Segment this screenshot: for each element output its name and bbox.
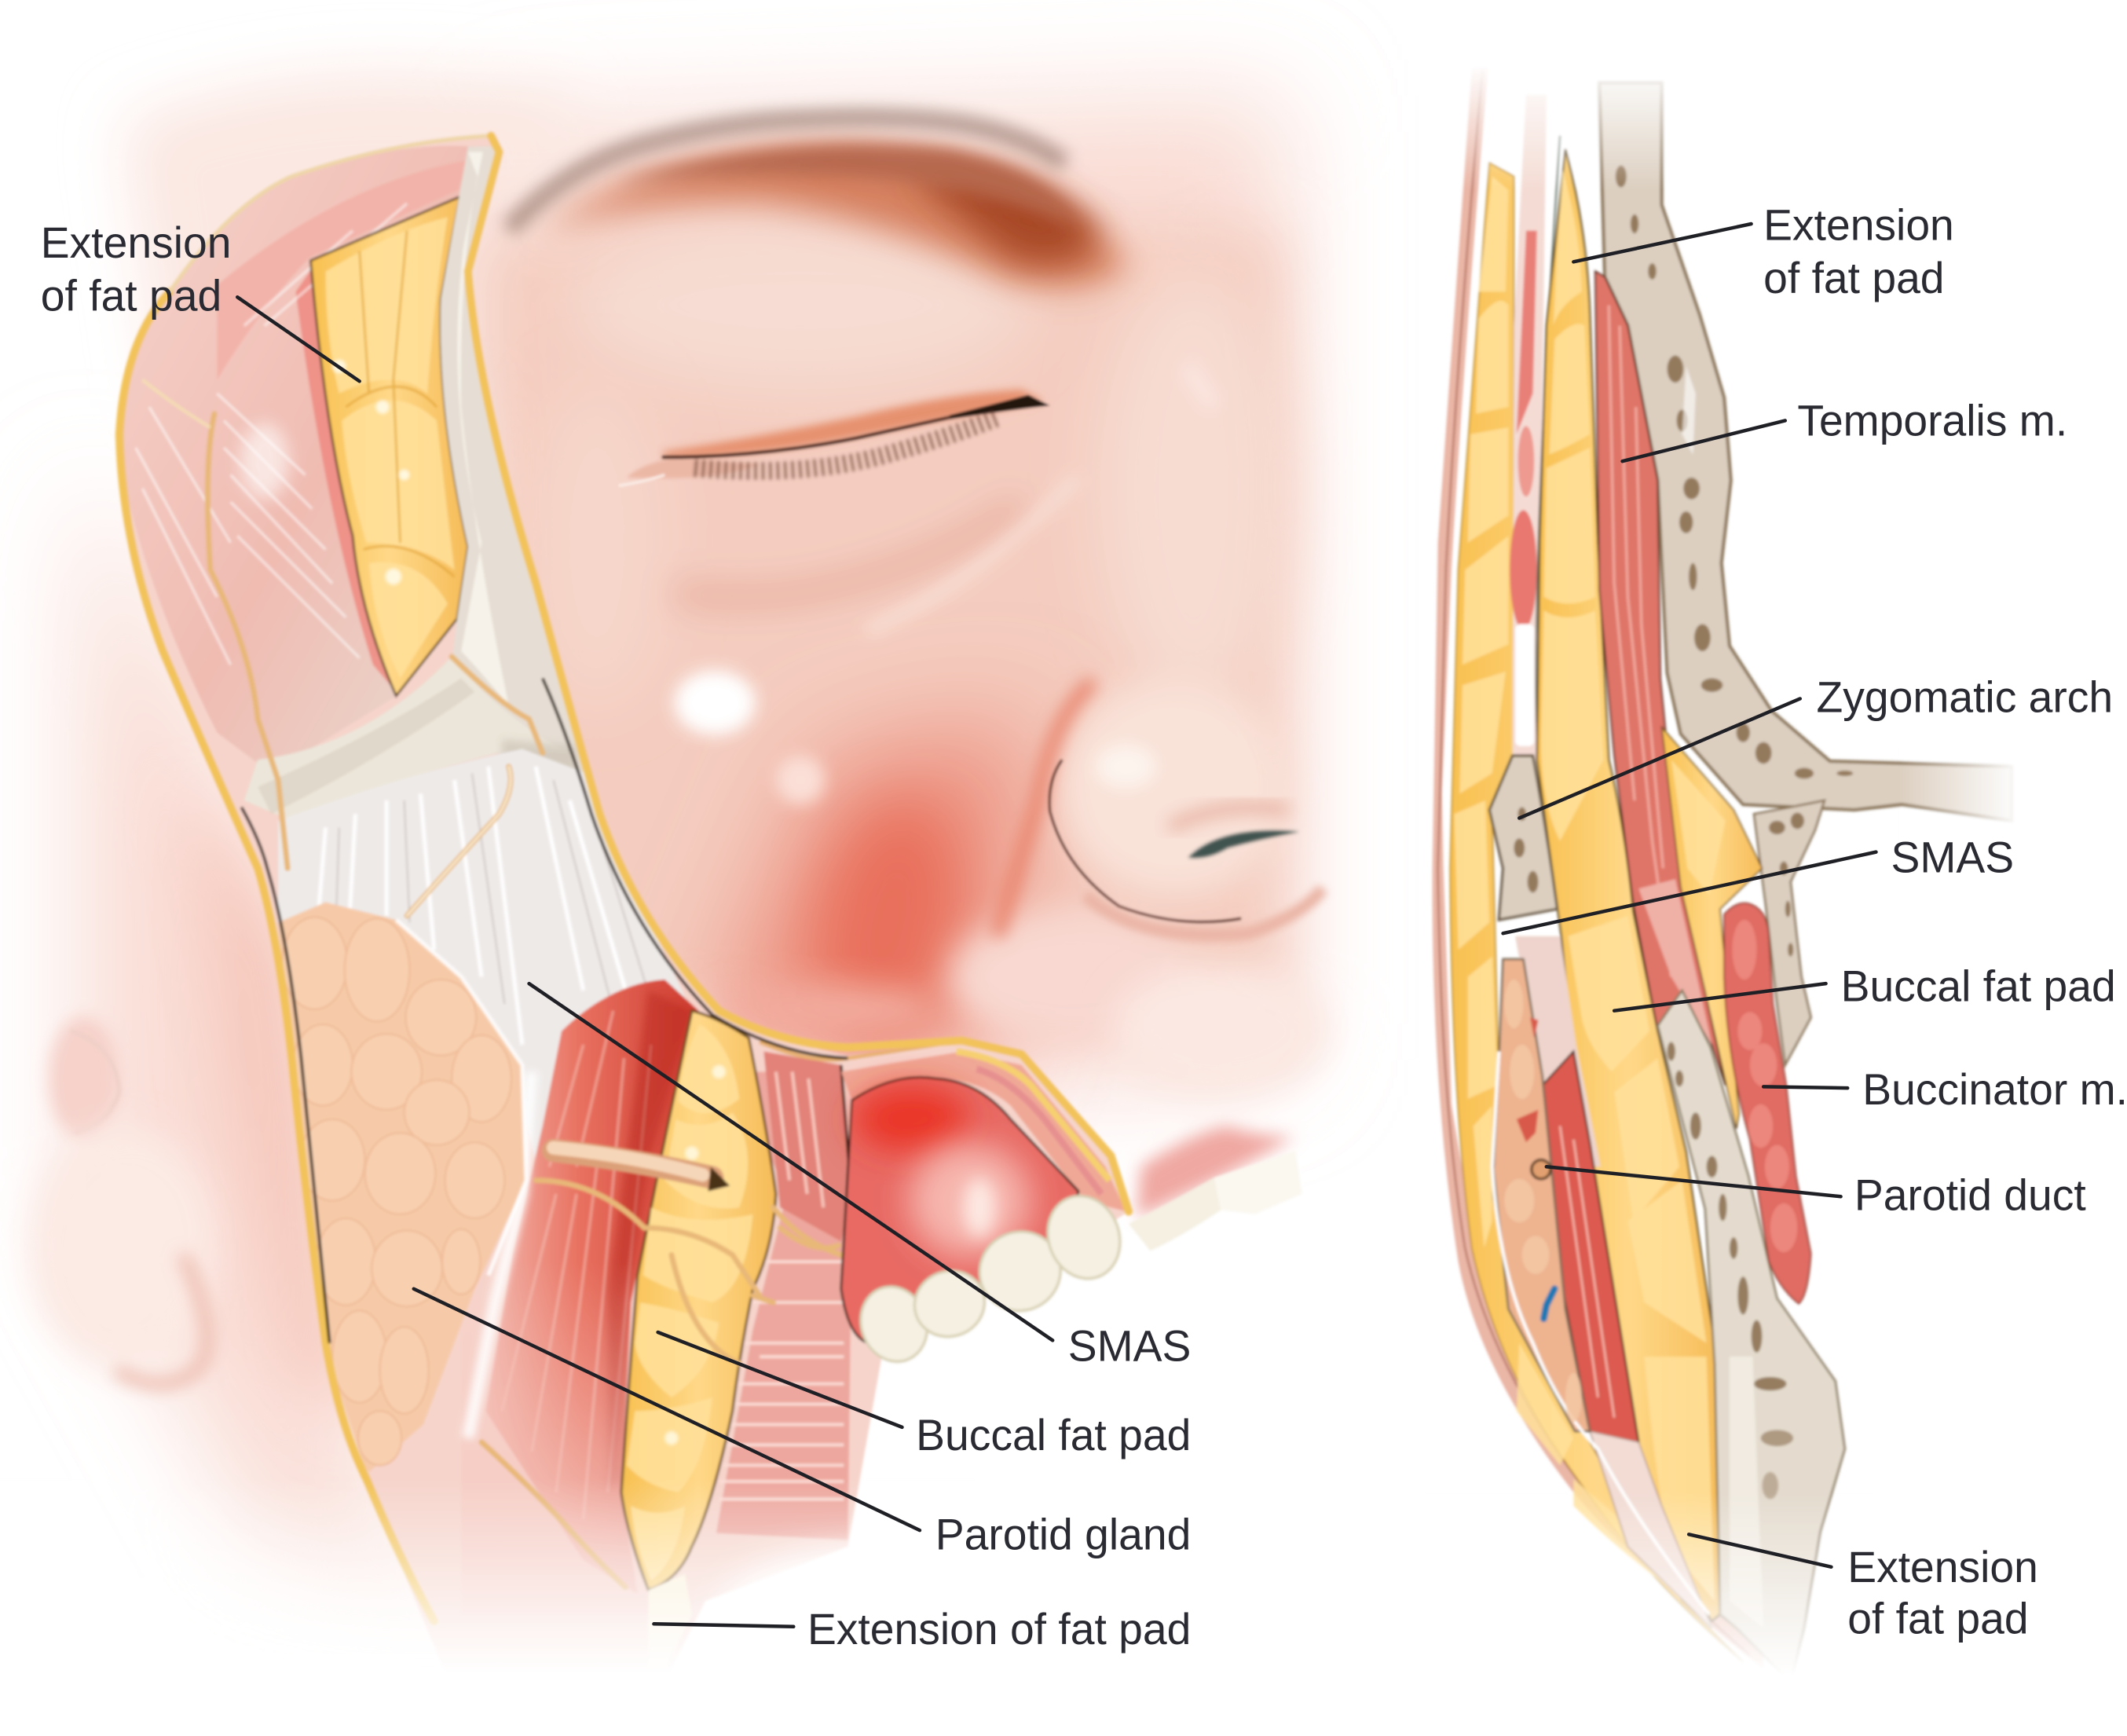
skull bone [1599,82,2012,821]
teeth [851,1151,1302,1371]
label: parotid gland [414,1289,1191,1558]
label: extension of fat pad, lower: of fat pad [1847,1594,2029,1643]
panel: coronal cross section [1424,41,2021,1696]
lower lip and chin skin [1137,1126,1295,1218]
label: extension of fat pad, upper [1573,201,1954,302]
buccal fat pad [621,1011,776,1668]
fat below zygomatic arch [1662,727,1762,1129]
facial skin [82,73,1330,1628]
subcutaneous fat [1450,163,1743,1662]
zygomatic arch cross section [1489,756,1558,920]
label: SMAS [529,983,1191,1370]
deep temporal fat pad extension [310,196,468,696]
label: buccal fat pad: Buccal fat pad [916,1411,1191,1459]
buccinator muscle [716,1051,852,1540]
label: SMAS: SMAS [1891,833,2014,882]
label: extension of fat pad, lower [1689,1534,2038,1643]
skin fade at bottom of left panel [0,1479,1017,1736]
temporalis muscle [1595,271,1726,1086]
label: extension of fat pad, lower: Extension [1847,1543,2038,1591]
label: temporalis [1623,396,2067,461]
label: SMAS [1503,833,2014,933]
masseter section [1515,936,1712,1628]
label: extension of fat pad, temple: of fat pad [41,272,221,320]
eyebrow [509,118,1129,287]
label: extension of fat pad, lower: Extension of fat pad [807,1605,1191,1654]
label: zygomatic arch: Zygomatic arch [1817,673,2113,722]
parotid section [1492,959,1709,1614]
panel: lateral face dissection [0,73,1329,1736]
label: extension of fat pad, upper: Extension [1763,201,1954,250]
label: parotid gland: Parotid gland [935,1510,1191,1558]
masseter fascia [278,749,692,1194]
label: SMAS: SMAS [1068,1321,1191,1370]
mandible ramus [1657,991,1845,1683]
ear and neck [27,1016,217,1384]
label: parotid duct: Parotid duct [1854,1171,2086,1220]
label: buccal fat pad: Buccal fat pad [1841,962,2116,1011]
superficial muscle and fascia layer [1510,95,1560,760]
label: temporalis: Temporalis m. [1797,396,2067,445]
buccinator muscle section [1724,903,1811,1304]
label: zygomatic arch [1519,673,2113,818]
incision outline [119,136,1129,1621]
zygomatic tendon band [244,657,577,821]
cross section fades [1424,41,2021,1696]
closed eye [619,390,1077,631]
temporal fascia strip [441,147,586,773]
labels: left panel [41,218,1191,1654]
cheek highlights [674,366,1214,804]
labels: right panel [1503,201,2127,1643]
label: extension of fat pad, upper: of fat pad [1763,254,1945,302]
parotid gland [278,903,526,1472]
label: extension of fat pad, temple: Extension [41,218,231,267]
dissection window [123,137,1126,1644]
deep temporal fat pad [1537,149,1720,1621]
temporoparietal muscle [115,146,474,773]
inner gum and palate [760,1041,1126,1343]
skin layer [1433,68,1763,1668]
label: extension of fat pad, temple [41,218,360,381]
zygoma and maxilla bone [1754,800,1825,1065]
nose [997,679,1323,936]
masseter muscle [461,980,698,1614]
label: buccal fat pad [658,1332,1191,1459]
label: parotid duct [1547,1166,2086,1220]
label: buccal fat pad [1614,962,2116,1011]
parotid duct and facial nerve branches [142,380,841,1588]
label: buccinator: Buccinator m. [1862,1065,2127,1114]
